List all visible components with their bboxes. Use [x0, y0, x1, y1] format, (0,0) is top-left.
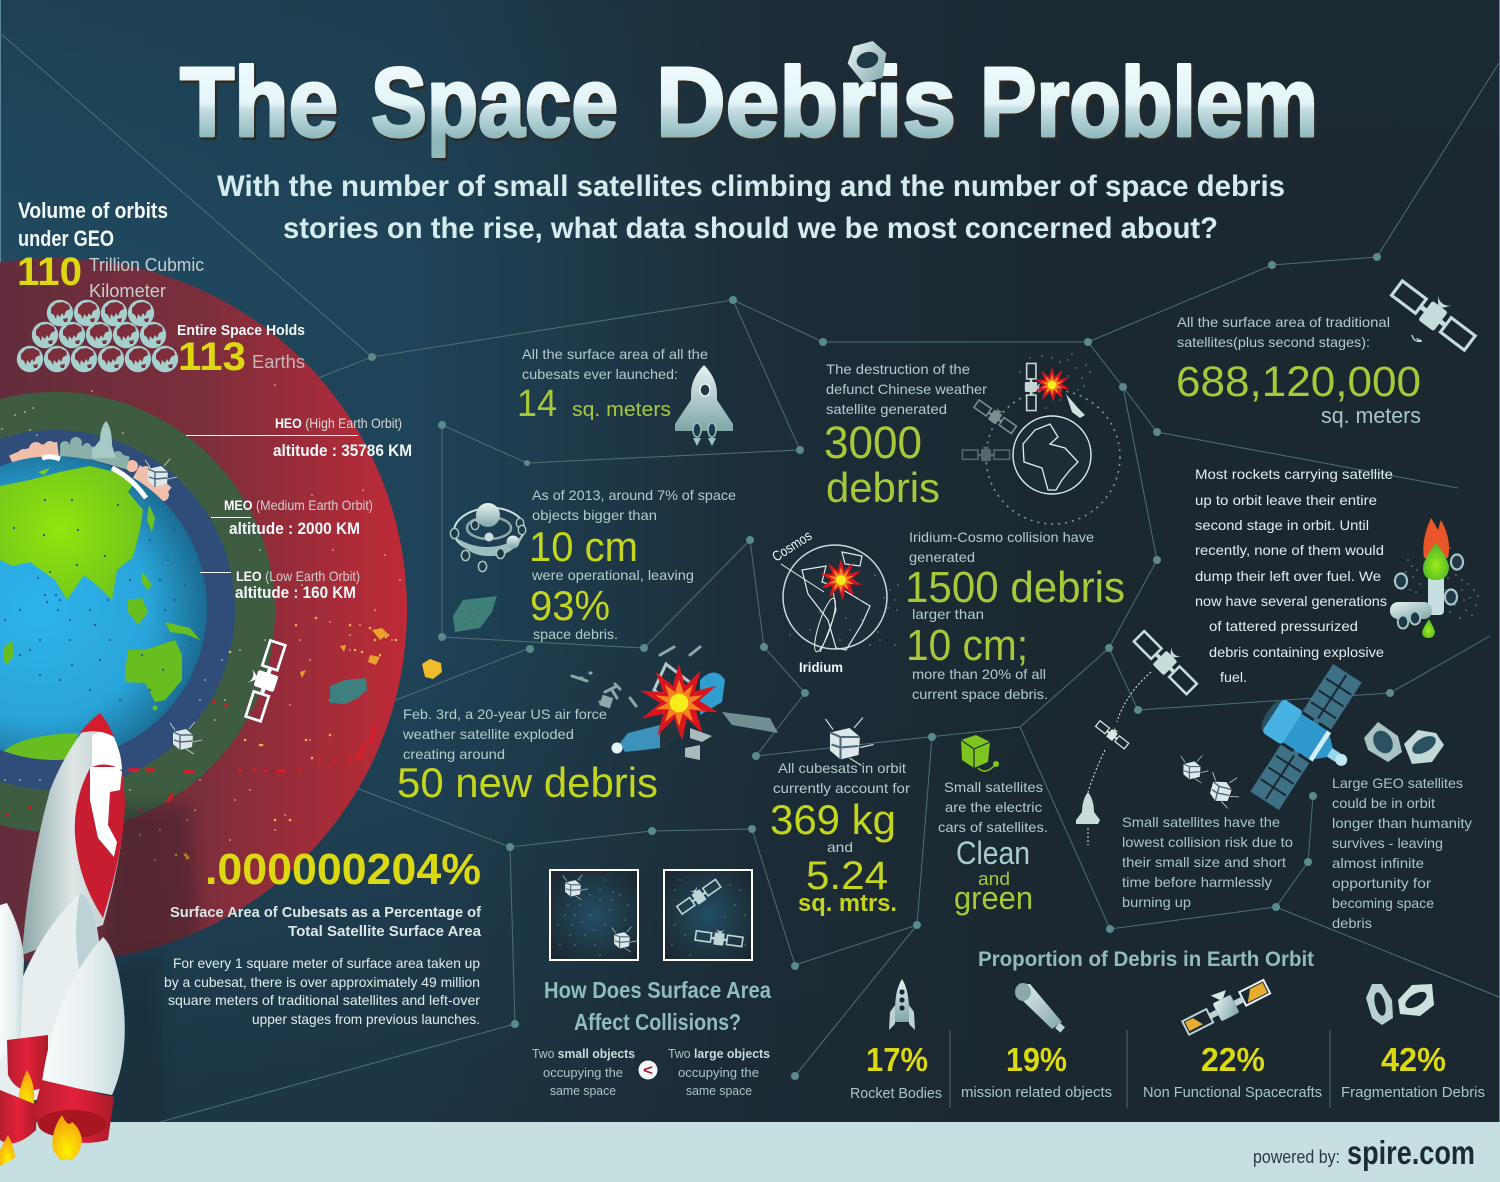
how does surface area heading: How Does Surface Area: [544, 977, 771, 1003]
clean and green stat: [938, 779, 1048, 916]
iridium cosmos stat: more than 20% of all: [912, 666, 1046, 682]
volume of orbits: Volume of orbits: [18, 198, 168, 223]
icon: satellite with launch trajectory: [1076, 626, 1202, 845]
chinese satellite stat: [824, 361, 987, 511]
subtitle: [217, 170, 1285, 245]
icon: satellite top right: [1389, 273, 1481, 353]
percentage stat: .000000204%: [205, 845, 481, 894]
proportion heading: Proportion of Debris in Earth Orbit: [978, 948, 1314, 971]
volume of orbits: [17, 198, 204, 301]
icon: exploding fuel tank: [1390, 518, 1478, 638]
icon: collision globe: Cosmos: [769, 527, 815, 565]
large GEO satellites text: longer than humanity: [1332, 815, 1472, 831]
big rocket: [0, 713, 125, 1166]
cloud plume: [12, 437, 169, 501]
left booster: [0, 903, 24, 1060]
orbit label: LEO: altitude : 160 KM: [235, 583, 356, 602]
title: [180, 47, 1318, 157]
iridium cosmos stat: 10 cm;: [906, 621, 1028, 670]
traditional satellites stat: 688,120,000: [1176, 358, 1421, 406]
ring: low earth orbit: [0, 430, 235, 790]
title: Space: [371, 47, 618, 157]
chinese satellite stat: The destruction of the: [826, 361, 970, 377]
comparison large objects: Two large objects: [668, 1046, 770, 1061]
icon: shuttle: [675, 365, 733, 446]
footer credit: [1253, 1134, 1475, 1171]
large GEO satellites text: Large GEO satellites: [1332, 775, 1463, 791]
title: Debris: [656, 47, 956, 157]
clean and green stat: Small satellites: [944, 779, 1043, 795]
stat: mission related objects: 19%: [1006, 1041, 1067, 1078]
chinese satellite stat: debris: [826, 464, 940, 511]
icon: two small cubesats: [1181, 755, 1244, 810]
large GEO satellites text: debris: [1332, 915, 1372, 931]
volume of orbits: under GEO: [18, 226, 114, 251]
title: The: [180, 47, 338, 157]
comparison small objects: [532, 1046, 635, 1098]
asteroid teal large: [453, 596, 497, 632]
launching rocket small: [92, 421, 116, 458]
percentage stat: by a cubesat, there is over approximately 49 million: [164, 974, 480, 990]
subtitle: stories on the rise, what data should we be most concerned about?: [283, 212, 1218, 245]
icon: group of earths: [17, 300, 178, 372]
clean and green stat: green: [954, 880, 1033, 916]
7 percent stat: [529, 487, 736, 642]
traditional satellites stat: [1176, 314, 1421, 428]
entire space holds: [177, 322, 305, 379]
orbit rings and earth: [0, 258, 407, 1122]
small satellites risk text: Small satellites have the: [1122, 814, 1280, 830]
centre booster: [0, 893, 100, 1100]
ring: high earth orbit: [0, 258, 407, 962]
less-than badge: <: [643, 1062, 653, 1079]
stat: rocket bodies: [850, 979, 942, 1102]
proportion panel: [850, 971, 1485, 1108]
large GEO satellites text: opportunity for: [1332, 875, 1431, 891]
percentage stat: Total Satellite Surface Area: [288, 923, 482, 940]
right flame: [52, 1115, 82, 1160]
comparison large objects: same space: [686, 1083, 752, 1098]
small satellites risk text: their small size and short: [1122, 854, 1286, 870]
iridium cosmos stat: generated: [909, 549, 975, 565]
orbit label: LEO: [200, 568, 360, 602]
title: Problem: [980, 47, 1318, 157]
large GEO satellites text: becoming space: [1332, 895, 1434, 911]
entire space holds: 113: [178, 335, 246, 379]
subtitle: With the number of small satellites climbing and the number of space debris: [217, 170, 1285, 203]
chinese satellite stat: defunct Chinese weather: [826, 381, 987, 397]
cubesat surface stat: All the surface area of all the: [522, 346, 708, 362]
satellite on orbit white: [238, 638, 288, 722]
7 percent stat: objects bigger than: [532, 507, 657, 523]
volume of orbits: 110: [17, 250, 82, 294]
stat: non functional spacecrafts: 22%: [1201, 1041, 1265, 1078]
7 percent stat: space debris.: [533, 626, 618, 642]
earth: [0, 456, 207, 767]
large GEO satellites text: [1332, 775, 1472, 931]
orbit label: LEO: LEO (Low Earth Orbit): [236, 568, 360, 584]
stat: mission related objects: mission related objects: [961, 1084, 1112, 1101]
cubesat mass stat: 369 kg: [770, 796, 896, 843]
rockets paragraph: up to orbit leave their entire: [1195, 492, 1377, 508]
small satellites risk text: time before harmlessly: [1122, 874, 1272, 890]
stat: non functional spacecrafts: Non Functional Spacecrafts: [1143, 1084, 1322, 1101]
orbit label: MEO: [211, 497, 373, 538]
percentage stat: upper stages from previous launches.: [252, 1011, 480, 1027]
large GEO satellites text: survives - leaving: [1332, 835, 1443, 851]
clean and green stat: are the electric: [945, 799, 1042, 815]
rockets paragraph: second stage in orbit. Until: [1195, 517, 1369, 533]
icon: green cubesat with plug: [961, 735, 999, 771]
7 percent stat: 93%: [530, 582, 610, 629]
rockets paragraph: of tattered pressurized: [1209, 618, 1358, 634]
iridium cosmos stat: current space debris.: [912, 686, 1048, 702]
rockets paragraph: recently, none of them would: [1195, 542, 1384, 558]
comparison small objects: same space: [550, 1083, 616, 1098]
feb 3rd stat: creating around: [403, 746, 505, 762]
stat: fragmentation debris: [1341, 984, 1485, 1101]
orbit label: HEO: [186, 415, 412, 460]
small satellites risk text: lowest collision risk due to: [1122, 834, 1293, 850]
icon: earth with orbit and explosion: [962, 354, 1120, 524]
iridium cosmos stat: [905, 529, 1125, 702]
percentage stat: Surface Area of Cubesats as a Percentage of: [170, 904, 482, 921]
footer band: [0, 1122, 1500, 1182]
traditional satellites stat: satellites(plus second stages):: [1177, 334, 1370, 350]
rockets paragraph: dump their left over fuel. We: [1195, 568, 1381, 584]
7 percent stat: were operational, leaving: [531, 567, 694, 583]
box: large objects: [664, 870, 752, 960]
comparison large objects: [668, 1046, 770, 1098]
how does surface area heading: Affect Collisions?: [574, 1009, 741, 1035]
iridium cosmos stat: Iridium-Cosmo collision have: [909, 529, 1094, 545]
stat: non functional spacecrafts: [1143, 971, 1322, 1101]
entire space holds: Entire Space Holds: [177, 322, 305, 339]
cubesat mass stat: All cubesats in orbit: [778, 760, 906, 776]
cubesat mass stat: and: [827, 839, 853, 855]
cubesat near earth: [145, 459, 177, 491]
cubesat surface stat: sq. meters: [572, 399, 671, 421]
rockets paragraph: now have several generations: [1195, 593, 1387, 609]
debris field: [2, 385, 400, 860]
icon: hex nuts: [1364, 722, 1444, 764]
rocket shadow on rings: [100, 805, 200, 965]
clean and green stat: cars of satellites.: [938, 819, 1048, 835]
volume of orbits: Kilometer: [89, 281, 166, 301]
comparison small objects: Two small objects: [532, 1046, 635, 1061]
cubesat mass stat: [770, 760, 910, 917]
icon: ringed planet: [450, 503, 526, 572]
right booster: [42, 937, 125, 1095]
footer credit: spire.com: [1347, 1134, 1475, 1171]
feb 3rd stat: weather satellite exploded: [402, 726, 574, 742]
less-than badge: [638, 1060, 658, 1080]
icon: large blue satellite: [1226, 648, 1388, 827]
nose cone: [80, 713, 114, 737]
feb 3rd stat: Feb. 3rd, a 20-year US air force: [403, 706, 607, 722]
asteroid yellow: [422, 659, 442, 679]
large GEO satellites text: almost infinite: [1332, 855, 1424, 871]
traditional satellites stat: All the surface area of traditional: [1177, 314, 1390, 330]
cubesat surface stat: cubesats ever launched:: [522, 366, 678, 382]
how does surface area heading: [544, 977, 771, 1035]
cubesat surface stat: 14: [517, 383, 557, 425]
rockets paragraph: fuel.: [1220, 669, 1247, 685]
small satellites risk text: burning up: [1122, 894, 1191, 910]
small satellites risk text: [1122, 814, 1293, 910]
7 percent stat: 10 cm: [529, 523, 638, 570]
orbit label: HEO: altitude : 35786 KM: [273, 441, 412, 460]
ring: medium earth orbit: [0, 392, 275, 832]
cubesat mass stat: 5.24: [806, 854, 888, 898]
rockets paragraph: Most rockets carrying satellite: [1195, 466, 1393, 482]
red stripe: [75, 764, 125, 918]
orbit label: MEO: altitude : 2000 KM: [229, 519, 360, 538]
traditional satellites stat: sq. meters: [1321, 403, 1421, 428]
stat: rocket bodies: 17%: [866, 1041, 928, 1078]
stat: rocket bodies: Rocket Bodies: [850, 1085, 942, 1102]
main body: [22, 713, 124, 955]
entire space holds: Earths: [252, 352, 305, 372]
volume of orbits: Trillion Cubmic: [89, 255, 204, 275]
7 percent stat: As of 2013, around 7% of space: [532, 487, 736, 503]
rockets paragraph: [1195, 466, 1393, 685]
clean and green stat: Clean: [956, 835, 1030, 871]
cubesat mass stat: currently account for: [773, 780, 910, 796]
percentage stat: square meters of traditional satellites and left-over: [168, 992, 480, 1008]
chinese satellite stat: 3000: [824, 417, 922, 468]
feb 3rd stat: [397, 706, 658, 806]
clean and green stat: and: [978, 869, 1010, 889]
icon: exploding satellite: [572, 647, 778, 760]
icon: cubesat: [826, 718, 874, 766]
comparison small objects: occupying the: [543, 1065, 623, 1080]
stat: mission related objects: [961, 983, 1112, 1101]
percentage stat: For every 1 square meter of surface area taken up: [173, 955, 480, 971]
large GEO satellites text: could be in orbit: [1332, 795, 1435, 811]
white nose panel: [92, 731, 122, 771]
comparison large objects: occupying the: [678, 1065, 759, 1080]
collision boxes: [550, 870, 752, 960]
rocket shadow on background: [110, 952, 165, 1122]
rockets paragraph: debris containing explosive: [1209, 644, 1384, 660]
right collar: [34, 1080, 114, 1143]
stat: fragmentation debris: 42%: [1381, 1041, 1446, 1078]
icon: collision globe: [769, 527, 898, 675]
iridium cosmos stat: larger than: [912, 606, 984, 622]
cubesat surface stat: [517, 346, 708, 425]
footer credit: powered by:: [1253, 1147, 1340, 1167]
cubesat mass stat: sq. mtrs.: [798, 890, 897, 917]
icon: hex nut on title: [844, 38, 892, 86]
chinese satellite stat: satellite generated: [826, 401, 947, 417]
box: small objects: [550, 870, 638, 960]
icon: collision globe: Iridium: [799, 659, 843, 675]
asteroid teal: [330, 678, 367, 704]
left collar and flame: [7, 1035, 48, 1091]
orbit label: HEO: HEO (High Earth Orbit): [275, 415, 402, 431]
white swoosh: [90, 767, 122, 857]
cubesat lower orbit: [170, 722, 202, 754]
percentage stat: [164, 845, 482, 1027]
feb 3rd stat: 50 new debris: [397, 759, 658, 806]
orbit label: MEO: MEO (Medium Earth Orbit): [224, 497, 373, 513]
stat: fragmentation debris: Fragmentation Debris: [1341, 1084, 1485, 1101]
iridium cosmos stat: 1500 debris: [905, 563, 1125, 612]
